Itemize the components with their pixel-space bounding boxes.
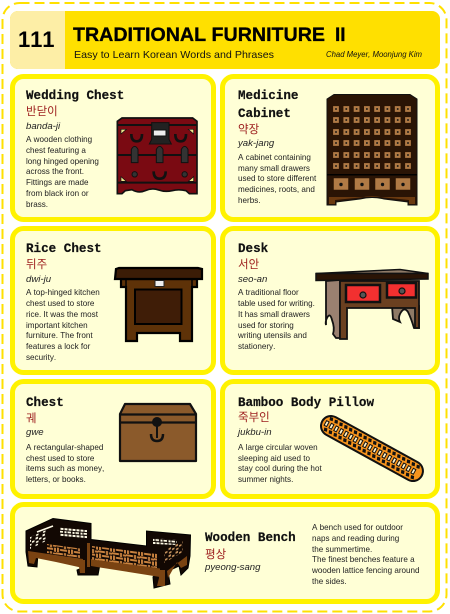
korean word: 궤 (26, 412, 37, 425)
description: brass. (26, 200, 48, 209)
heading: Chest (26, 396, 64, 410)
romanization: gwe (26, 427, 44, 438)
description: chest used to store (26, 454, 95, 463)
description: used to store different (238, 174, 317, 183)
description: herbs. (238, 196, 260, 205)
description: the sides. (312, 577, 347, 586)
description: Fittings are made (26, 178, 89, 187)
description: letters, or books. (26, 475, 86, 484)
description: summer nights. (238, 475, 293, 484)
description: chest featuring a (26, 146, 86, 155)
description (26, 443, 104, 484)
description: A top-hinged kitchen (26, 288, 100, 297)
heading: Wooden Bench (205, 531, 296, 545)
description (26, 288, 100, 362)
korean word: 약장 (238, 122, 260, 136)
description: the summertime. (312, 545, 372, 554)
romanization: jukbu-in (236, 427, 272, 438)
description: A rectangular-shaped (26, 443, 103, 452)
korean word: 서안 (238, 258, 260, 271)
panel: bamboo body pillow (222, 382, 438, 496)
korean word: 죽부인 (238, 411, 270, 424)
description: wooden lattice fencing around (311, 566, 420, 575)
panel: medicine cabinet (222, 76, 438, 220)
icon: chest (120, 404, 196, 461)
description: naps and reading during (312, 534, 399, 543)
description: security. (26, 353, 56, 362)
description: It has small drawers (238, 310, 310, 319)
title: TRADITIONAL FURNITURE (73, 25, 325, 46)
heading: Rice Chest (26, 242, 102, 256)
icon: bamboo pillow (322, 416, 421, 480)
description: stay cool during the hot (238, 464, 322, 473)
description: important kitchen (26, 321, 88, 330)
authors: Chad Meyer, Moonjung Kim (326, 50, 422, 59)
description (238, 153, 317, 205)
romanization: yak-jang (237, 138, 275, 149)
description (311, 523, 420, 586)
title numeral: II (335, 25, 346, 46)
icon: wooden bench (26, 518, 190, 588)
description: features a lock for (26, 342, 91, 351)
description (238, 443, 322, 484)
romanization: seo-an (238, 274, 267, 285)
heading: Wedding Chest (26, 89, 124, 103)
description: writing utensils and (237, 331, 307, 340)
lesson number: 111 (18, 27, 54, 52)
header banner (10, 11, 440, 69)
icon: desk (316, 270, 428, 339)
description: chest used to store (26, 299, 95, 308)
panel: rice chest (12, 228, 214, 372)
description: A traditional floor (238, 288, 299, 297)
panel: wooden bench (12, 504, 438, 602)
romanization: pyeong-sang (204, 562, 261, 573)
description: A cabinet containing (238, 153, 311, 162)
description: many small drawers (238, 164, 310, 173)
description: items such as money, (26, 464, 104, 473)
description: long hinged opening (26, 157, 99, 166)
description (237, 288, 315, 351)
romanization: dwi-ju (26, 274, 52, 285)
korean word: 뒤주 (26, 258, 47, 271)
romanization: banda-ji (26, 121, 61, 132)
description: A large circular woven (238, 443, 318, 452)
description: used for storing (238, 321, 294, 330)
description: A wooden clothing (26, 135, 92, 144)
description: across the front. (26, 167, 84, 176)
description: rice. It was the most (26, 310, 99, 319)
description: furniture. The front (26, 331, 93, 340)
panel: desk (222, 228, 438, 372)
heading: Desk (238, 242, 269, 256)
subtitle: Easy to Learn Korean Words and Phrases (74, 49, 274, 61)
korean word: 평상 (205, 548, 227, 561)
description: from black iron or (26, 189, 89, 198)
description: medicines, roots, and (238, 185, 315, 194)
description: A bench used for outdoor (312, 523, 403, 532)
icon: medicine cabinet (327, 94, 417, 205)
description: The finest benches feature a (312, 555, 415, 564)
icon: wedding chest (117, 118, 197, 194)
korean word: 반닫이 (26, 105, 58, 118)
lesson number block (10, 11, 65, 69)
description: stationery. (238, 342, 275, 351)
icon: rice chest (115, 268, 202, 341)
panel: wedding chest (12, 76, 214, 220)
description: table used for writing. (238, 299, 315, 308)
panel: chest (12, 382, 214, 496)
description: sleeping aid used to (238, 454, 310, 463)
heading second line: Cabinet (238, 107, 291, 121)
heading: Medicine (238, 89, 298, 103)
description (26, 135, 99, 209)
heading: Bamboo Body Pillow (238, 396, 374, 410)
